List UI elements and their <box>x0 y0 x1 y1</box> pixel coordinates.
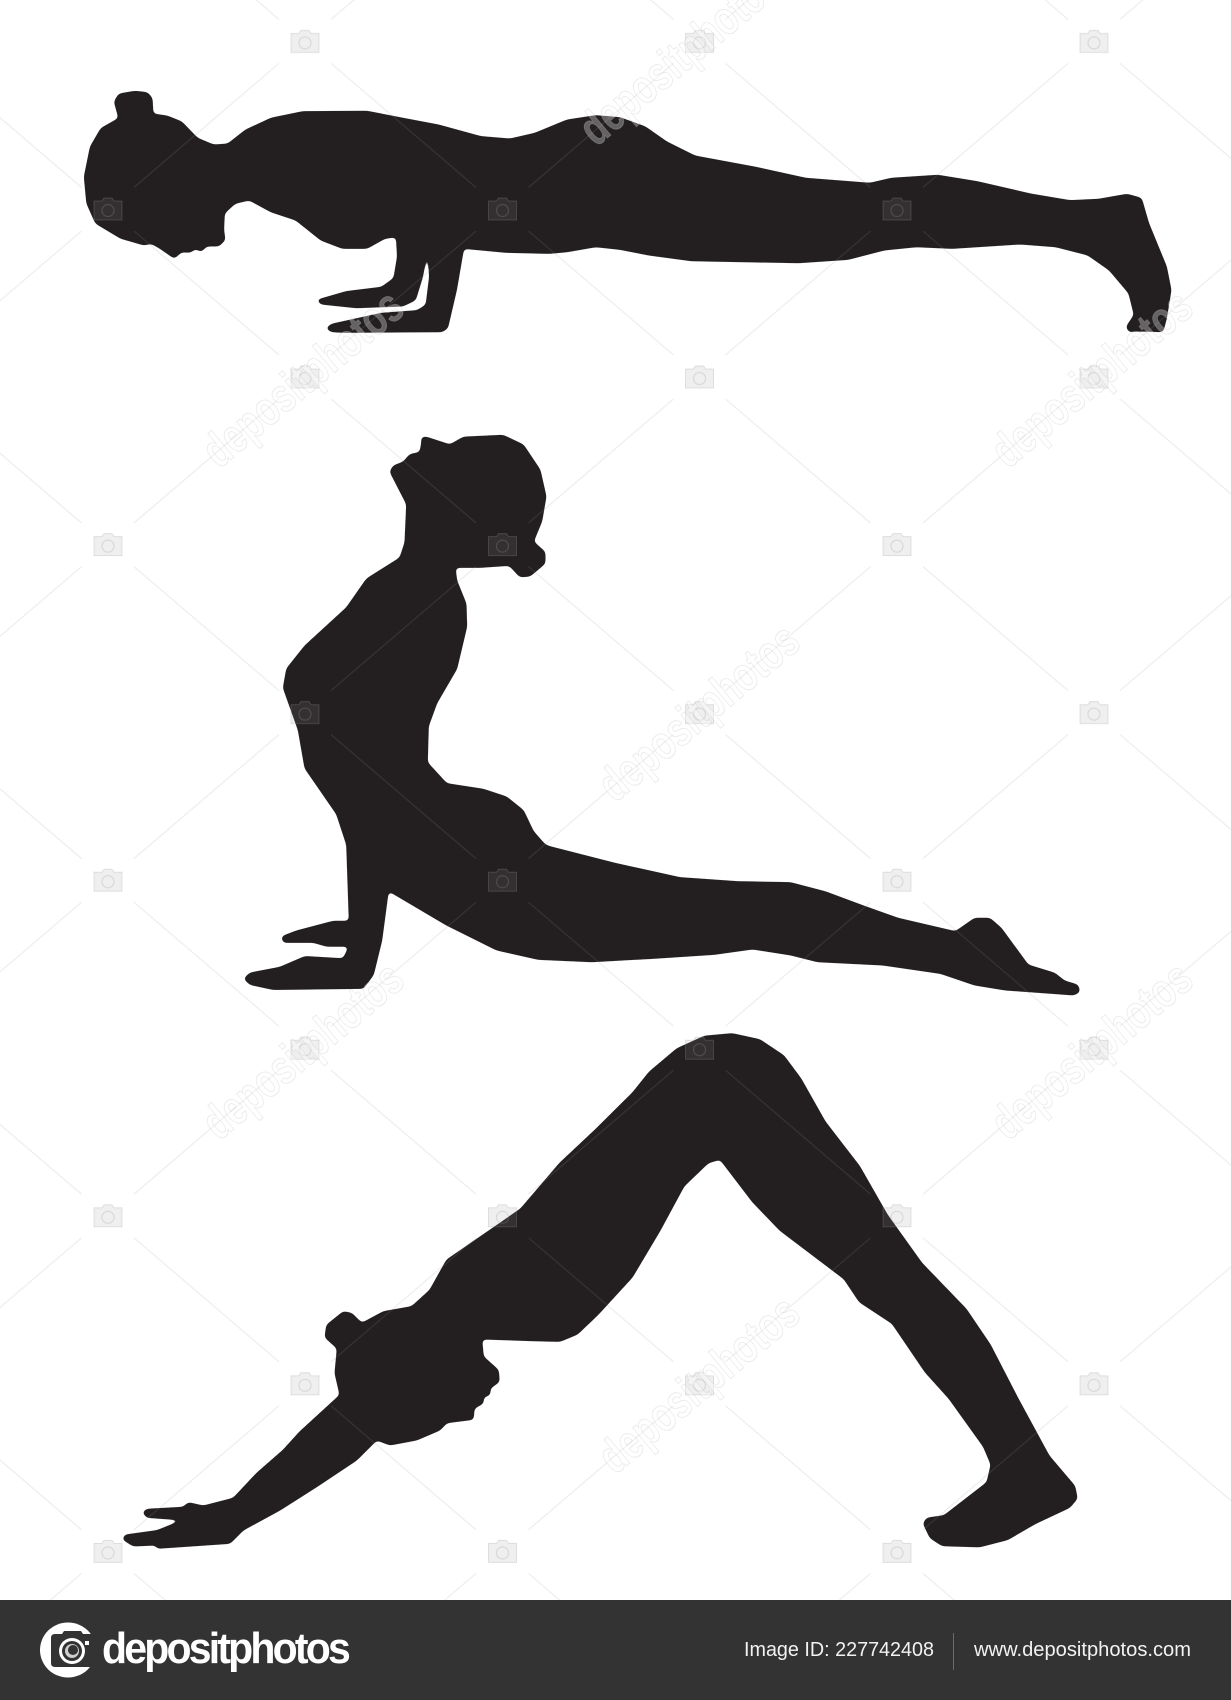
divider <box>953 1633 954 1670</box>
logo wordmark: depositphotos <box>102 1624 349 1673</box>
watermark wordmarks: depositphotos <box>192 280 414 478</box>
pose 1: chaturanga plank silhouette <box>84 91 1171 332</box>
website url: www.depositphotos.com <box>973 1639 1191 1661</box>
pose 3: downward dog silhouette <box>123 1034 1077 1548</box>
watermark wordmarks: depositphotos <box>192 952 414 1150</box>
watermark wordmarks: depositphotos <box>588 1286 810 1484</box>
image id: Image ID: 227742408 <box>744 1639 934 1661</box>
icon: depositphotos camera logo <box>40 1622 96 1678</box>
footer bar <box>0 1600 1231 1700</box>
watermark wordmarks <box>192 0 1203 1484</box>
pose 2: upward dog silhouette <box>244 435 1080 995</box>
watermark wordmarks: depositphotos <box>588 614 810 812</box>
